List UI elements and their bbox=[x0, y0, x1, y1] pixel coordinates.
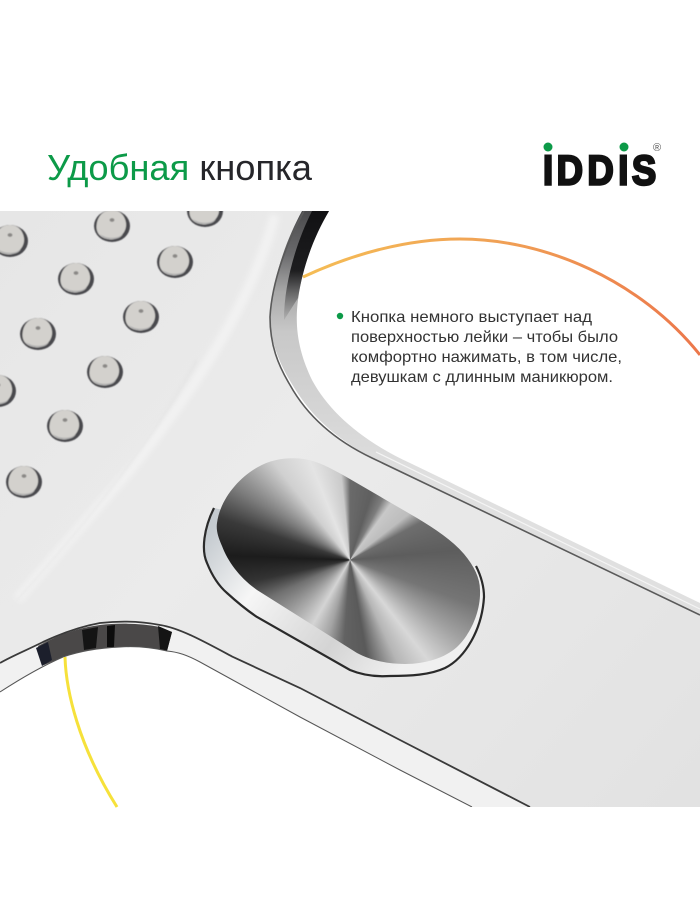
description text: комфортно нажимать, в том числе, bbox=[351, 349, 622, 366]
button recess bbox=[204, 508, 484, 676]
callout arc: yellow bbox=[65, 657, 117, 807]
upper chrome rim bbox=[270, 211, 700, 615]
bullet bbox=[337, 313, 343, 319]
nozzles bbox=[0, 195, 223, 498]
callout arc: orange bbox=[303, 239, 700, 355]
description text: девушкам с длинным маникюром. bbox=[351, 369, 613, 386]
description text: поверхностью лейки – чтобы было bbox=[351, 329, 618, 346]
title: Удобная кнопка bbox=[47, 147, 313, 188]
description text: Кнопка немного выступает над bbox=[351, 309, 593, 326]
lower chrome rim bbox=[0, 622, 530, 807]
product photo: shower head bbox=[0, 142, 700, 808]
logo: iDDIS: IDDIS bbox=[543, 148, 656, 194]
surface crease highlight bbox=[134, 219, 274, 466]
shower head body bbox=[0, 211, 700, 807]
button: brushed metal bbox=[216, 458, 480, 664]
logo: iDDIS: ® bbox=[653, 142, 661, 154]
